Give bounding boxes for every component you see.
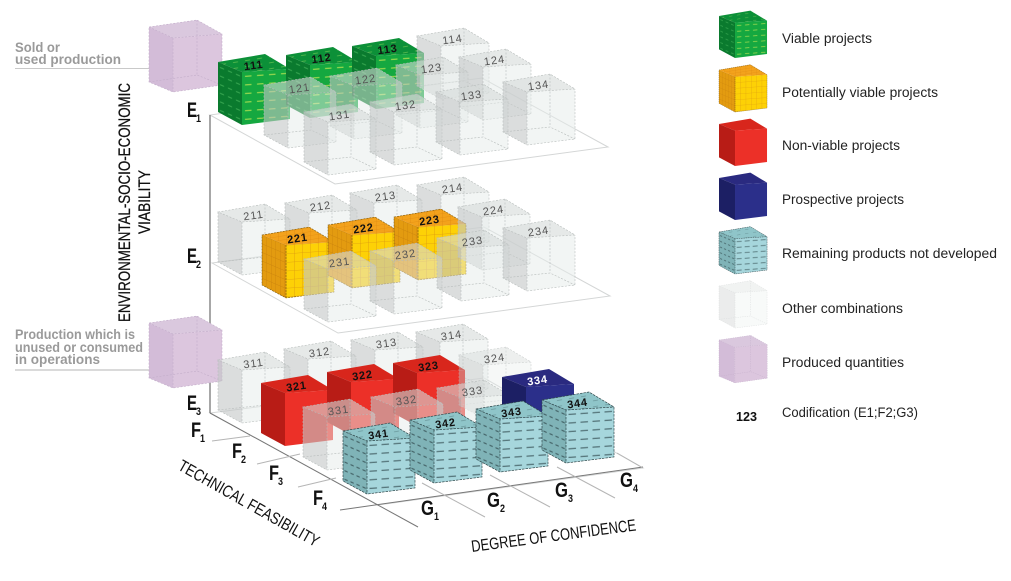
axis grid: F and G base lines — [210, 413, 643, 527]
cube 212: 212 — [309, 200, 332, 214]
cube 344: 344 — [566, 397, 589, 411]
cube 343: 343 — [500, 406, 523, 420]
cube 133: 133 — [460, 89, 483, 103]
label: E1: E — [187, 99, 197, 122]
cube 232: 232 — [394, 248, 417, 262]
label: G3: 3 — [568, 493, 573, 505]
cube 112: 112 — [311, 52, 332, 66]
cube 112 — [286, 47, 358, 118]
text: production unused or consumed in operations: Production which is — [15, 327, 135, 342]
legend item: produced quantities — [719, 335, 904, 383]
cube 212 — [285, 195, 357, 266]
cube 314 — [416, 324, 488, 395]
cube 341 — [343, 423, 415, 494]
panel: plane E3 — [210, 378, 643, 505]
cube 322: 322 — [351, 369, 374, 383]
cube 214 — [417, 177, 489, 248]
cube 312: 312 — [308, 346, 331, 360]
cube 332: 332 — [395, 394, 418, 408]
cube 122 — [330, 68, 402, 139]
level E2 cubes — [218, 177, 575, 322]
label: G1: 1 — [434, 511, 439, 523]
cube 224 — [458, 199, 530, 270]
cube 213: 213 — [374, 190, 397, 204]
cube 331 — [303, 399, 375, 470]
text: production unused or consumed in operations: in operations — [15, 352, 100, 367]
cube 132: 132 — [394, 99, 417, 113]
cube 113 — [352, 38, 424, 109]
cube 131: 131 — [328, 109, 351, 123]
legend item: codification: 123 — [736, 410, 757, 424]
legend item: viable projects: Viable projects — [782, 31, 872, 46]
cube 334: 334 — [526, 374, 549, 388]
cube 213 — [350, 185, 422, 256]
axis title: environmental-socio-economic viability: ENVIRONMENTAL-SOCIO-ECONOMIC — [116, 83, 134, 322]
cube 232 — [370, 243, 442, 314]
text: sold or used production — [15, 40, 160, 68]
cube 113: 113 — [377, 43, 398, 57]
cube 114 — [417, 28, 489, 99]
icon: purple cube unused production — [149, 316, 222, 388]
cube 114: 114 — [442, 33, 464, 47]
cube 342: 342 — [434, 417, 457, 431]
legend item: other combinations — [719, 281, 903, 328]
label: G4: G — [620, 469, 633, 492]
cube 111: 111 — [243, 59, 264, 73]
cube 234: 234 — [527, 225, 550, 239]
label: F2: 2 — [241, 454, 246, 466]
cube 211 — [218, 204, 290, 275]
cube 332 — [371, 389, 443, 460]
label: G1: G — [421, 497, 434, 520]
cube 132 — [370, 94, 442, 165]
cube 122: 122 — [354, 73, 377, 87]
axis title: technical feasibility: TECHNICAL FEASIBILITY — [175, 457, 322, 551]
text: sold or used production: used production — [15, 52, 121, 67]
cube 133 — [436, 84, 508, 155]
cube 223 — [394, 209, 466, 280]
text: sold or used production: Sold or — [15, 40, 61, 55]
legend item: non-viable projects — [719, 119, 900, 166]
legend item: potentially viable projects — [719, 65, 938, 112]
icon: purple cube sold or used production — [149, 20, 222, 92]
label: G2: 2 — [500, 503, 505, 515]
level E1 cubes — [218, 28, 575, 175]
label: F3: 3 — [278, 476, 283, 488]
cube 123: 123 — [420, 62, 443, 76]
label: G4: 4 — [633, 483, 639, 495]
cube 313 — [351, 332, 423, 403]
cube 333: 333 — [461, 385, 484, 399]
cube 134 — [503, 74, 575, 145]
legend item: codification — [736, 405, 918, 424]
label: F2: F — [232, 440, 242, 463]
legend item: other combinations: Other combinations — [782, 301, 903, 316]
level E3 cubes — [218, 324, 614, 494]
legend item: remaining products not developed — [719, 227, 997, 274]
cube 214: 214 — [441, 182, 464, 196]
legend item: codification: Codification (E1;F2;G3) — [782, 405, 918, 420]
label: E3: 3 — [196, 406, 201, 418]
label: G2: G — [487, 489, 500, 512]
cube 221 — [262, 227, 334, 298]
cube 341: 341 — [367, 428, 390, 442]
cube 311 — [218, 352, 290, 423]
axis title: degree of confidence: DEGREE OF CONFIDENCE — [470, 516, 637, 556]
cube 344 — [542, 392, 614, 463]
legend item: prospective projects: Prospective projects — [782, 192, 904, 207]
label: E3: E — [187, 392, 197, 415]
label: F1: 1 — [200, 433, 205, 445]
label: F3: F — [269, 462, 279, 485]
cube 223: 223 — [418, 214, 441, 228]
cube 324 — [459, 347, 531, 418]
cube 311: 311 — [243, 357, 265, 371]
panel: plane E2 — [212, 227, 610, 333]
legend item: remaining products not developed: Remaining products not developed — [782, 246, 997, 261]
label: G3: G — [555, 479, 568, 502]
cube 314: 314 — [440, 329, 463, 343]
cube 321 — [261, 375, 333, 446]
label: F1: F — [191, 419, 201, 442]
cube 121: 121 — [288, 82, 311, 96]
cube 124: 124 — [483, 54, 506, 68]
cube 233: 233 — [461, 235, 484, 249]
vertical axis — [209, 115, 211, 413]
cube 124 — [459, 49, 531, 120]
label: E1: 1 — [196, 113, 201, 125]
text: production unused or consumed in operations — [15, 327, 160, 370]
cube 313: 313 — [375, 337, 398, 351]
legend — [719, 11, 997, 424]
panel: plane E1 — [210, 78, 608, 184]
legend item: prospective projects — [719, 173, 904, 220]
label: E2: 2 — [196, 259, 201, 271]
cube 211: 211 — [243, 209, 265, 223]
cube 312 — [284, 341, 356, 412]
cube 234 — [503, 220, 575, 291]
text: production unused or consumed in operations: unused or consumed — [15, 340, 143, 355]
cube 343 — [476, 401, 548, 472]
cube 321: 321 — [285, 380, 308, 394]
cube 324: 324 — [483, 352, 506, 366]
legend item: non-viable projects: Non-viable projects — [782, 138, 900, 153]
label: E2: E — [187, 245, 197, 268]
cube 111 — [218, 54, 290, 125]
axis title: environmental-socio-economic viability — [116, 83, 154, 322]
cube 323: 323 — [417, 360, 440, 374]
cube 334 — [502, 369, 574, 440]
cube 222 — [328, 217, 400, 288]
cube 222: 222 — [352, 222, 375, 236]
cube 233 — [437, 230, 509, 301]
cube 221: 221 — [286, 232, 309, 246]
label: F4: F — [313, 487, 323, 510]
cube 342 — [410, 412, 482, 483]
legend item: viable projects — [719, 11, 872, 58]
cube 131 — [304, 104, 376, 175]
cube 121 — [264, 77, 336, 148]
cube 231 — [304, 251, 376, 322]
cube 134: 134 — [527, 79, 550, 93]
cube 322 — [327, 364, 399, 435]
legend item: potentially viable projects: Potentially viable projects — [782, 85, 938, 100]
cube 123 — [396, 57, 468, 128]
cube 333 — [437, 380, 509, 451]
legend item: produced quantities: Produced quantities — [782, 355, 904, 370]
label: F4: 4 — [322, 501, 328, 513]
cube 331: 331 — [327, 404, 350, 418]
axis title: environmental-socio-economic viability: VIABILITY — [136, 170, 154, 234]
cube 231: 231 — [328, 256, 351, 270]
cube 323 — [393, 355, 465, 426]
cube 224: 224 — [482, 204, 505, 218]
